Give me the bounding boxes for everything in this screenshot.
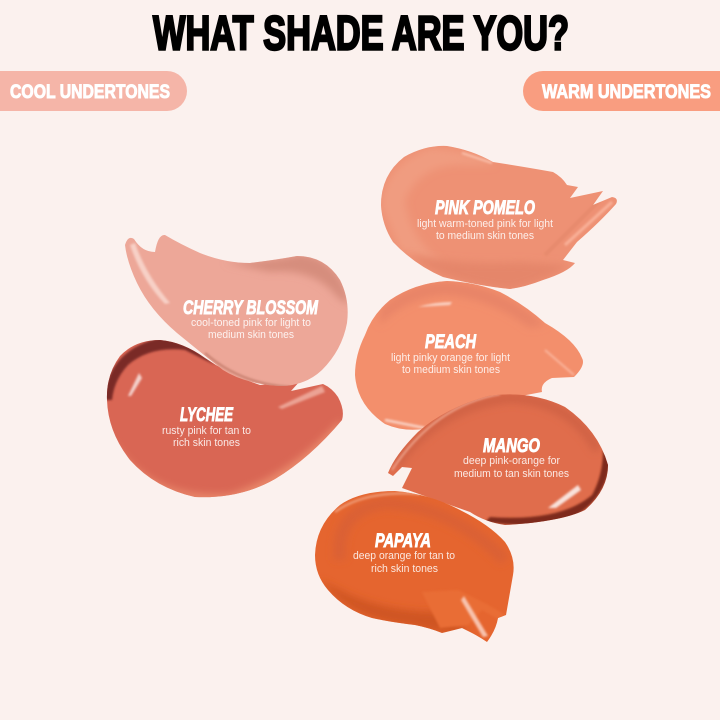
label: mango: deep pink-orange for [463,455,560,467]
swatch: peach [355,281,583,430]
label: cherry blossom: CHERRY BLOSSOM [183,298,319,319]
label: cherry blossom: cool-toned pink for light to [191,317,311,329]
swatch: lychee [106,340,343,498]
label: peach: light pinky orange for light [391,352,510,364]
label: papaya: PAPAYA [375,531,431,552]
swatch: cherry blossom [125,235,350,387]
label: papaya [353,531,455,575]
label: mango: medium to tan skin tones [454,468,569,480]
label: mango: MANGO [483,436,540,457]
swatch: mango [388,394,611,525]
label: pink pomelo: light warm-toned pink for light [417,218,553,230]
label: pink pomelo: to medium skin tones [436,230,534,242]
label: peach [391,332,510,376]
label: cherry blossom: medium skin tones [208,329,294,341]
label: mango [454,436,569,480]
pill: cool undertones [0,71,187,111]
label: peach: PEACH [425,332,477,353]
label: lychee: LYCHEE [180,405,234,426]
label: pink pomelo [417,198,553,242]
label: peach: to medium skin tones [402,364,500,376]
label: cherry blossom [183,298,319,341]
label: lychee: rusty pink for tan to [162,425,251,437]
label: papaya: rich skin tones [371,563,438,575]
swatch: pink pomelo [381,146,617,290]
label: lychee: rich skin tones [173,437,240,449]
label: lychee [162,405,251,449]
pill: warm undertones [523,71,720,111]
title: WHAT SHADE ARE YOU? [153,8,569,60]
label: pink pomelo: PINK POMELO [435,198,535,219]
swatch: papaya [315,491,514,642]
label: papaya: deep orange for tan to [353,550,455,562]
pill: cool undertones: COOL UNDERTONES [10,82,170,103]
